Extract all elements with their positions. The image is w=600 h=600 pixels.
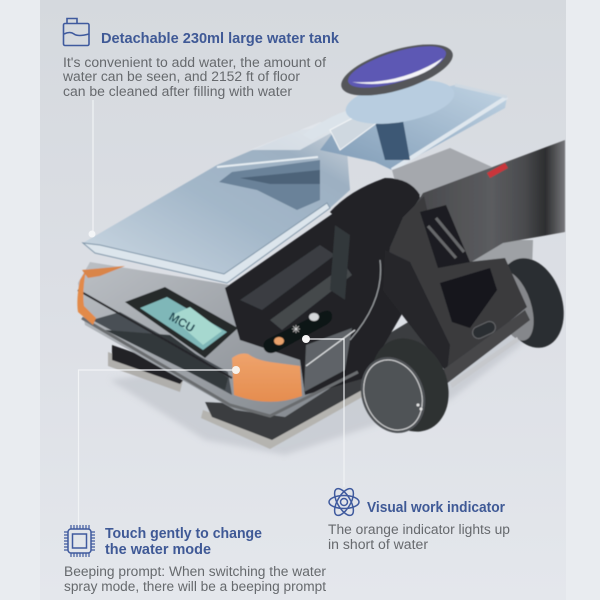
text: touch description: spray mode, there will be a beeping prompt [64,579,326,594]
left mop pad [108,345,190,392]
text: water tank description: water can be seen, and 2152 ft of floor [62,69,301,84]
grey tank housing [392,148,492,200]
text: touch description: Beeping prompt: When switching the water [64,564,327,579]
heading: touch gently: the water mode [105,541,211,558]
transparent body [78,195,420,417]
text: indicator description [328,522,510,552]
text: water tank description: It's convenient to add water, the amount of [63,55,326,70]
text: touch description [64,564,327,594]
dark motor housing [330,178,420,250]
heading: touch gently: Touch gently to change [105,525,262,542]
handle and neck [383,140,565,385]
filter cup lid [336,34,458,131]
rear tank section [303,85,507,170]
text: indicator description: The orange indicator lights up [328,522,510,537]
rear housing [460,240,533,290]
control panel: ✳ [291,324,301,336]
text: water tank description: can be cleaned after filling with water [63,84,293,99]
large transparent water tank [83,122,350,283]
icon: water tank [64,18,89,46]
orange water indicator [232,354,302,402]
rear wheel [487,250,575,356]
heading: touch gently [105,525,262,558]
control panel [264,311,332,353]
text: indicator description: in short of water [328,537,429,552]
icon: chip [64,525,95,557]
mop strip behind front wheel [450,337,519,388]
callout line: touch control [78,366,240,526]
front mop pad [201,385,364,449]
MCU board: MCU [166,309,197,335]
heading: visual work indicator: Visual work indicator [367,499,505,516]
front wheel [350,327,462,443]
left orange strip [77,270,96,325]
heading: water tank: Detachable 230ml large water tank [101,30,340,47]
vacuum illustration [77,34,575,455]
MCU board [140,297,227,350]
callout line: indicator [302,335,344,487]
floor shadow [110,330,540,455]
base plate [205,300,455,440]
text: water tank description [62,55,326,99]
callout line: water tank [88,100,96,238]
icon: atom [329,486,359,518]
